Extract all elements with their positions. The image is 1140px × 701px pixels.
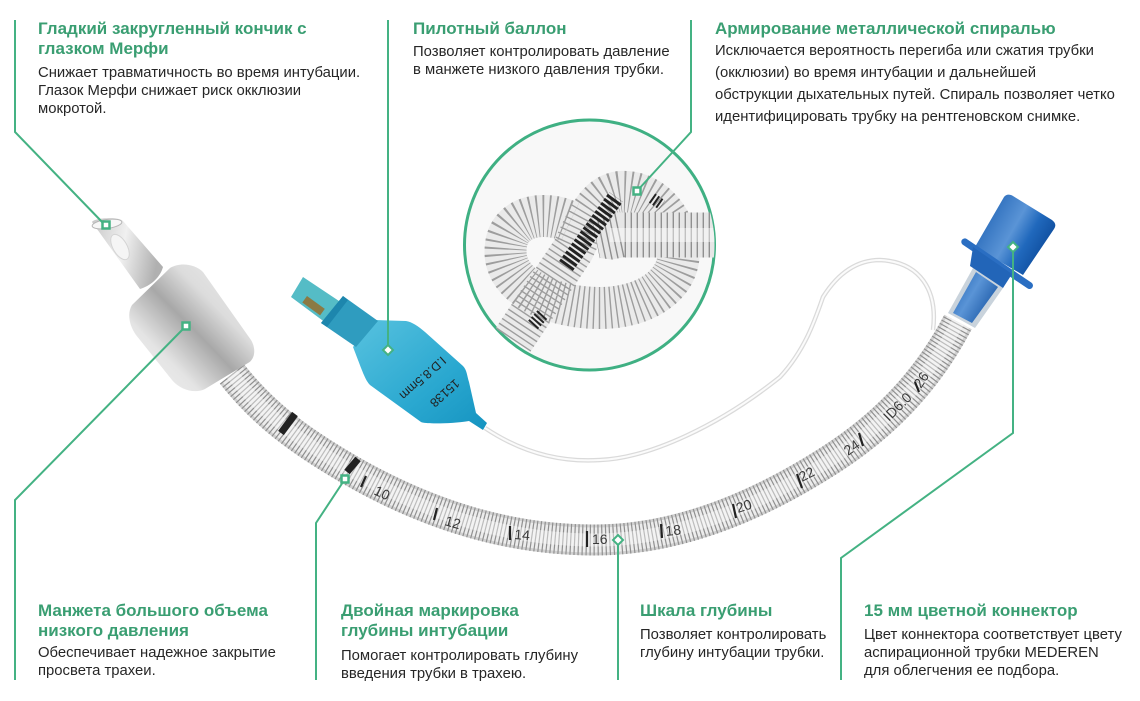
text: depth marking: введения трубки в трахею.: [341, 666, 526, 682]
leader line: spiral: [634, 20, 691, 194]
pilot line tube: [485, 260, 934, 460]
leader line: cuff: [15, 322, 190, 680]
depth scale text: 14: [514, 526, 531, 543]
leader line: connector: [841, 242, 1018, 680]
depth scale text: 24: [841, 436, 863, 458]
depth scale text: 18: [665, 521, 682, 539]
text: connector: для облегчения ее подбора.: [864, 663, 1059, 679]
text: cuff: просвета трахеи.: [38, 663, 156, 679]
cuff: [129, 265, 254, 391]
text: connector: аспирационной трубки MEDEREN: [864, 645, 1099, 661]
text: tip: Глазок Мерфи снижает риск окклюзии: [38, 83, 301, 99]
text: depth marking: [341, 601, 578, 682]
text: pilot balloon: Позволяет контролировать давление: [413, 44, 670, 60]
text: cuff: Манжета большого объема: [38, 601, 268, 620]
text: depth scale: Позволяет контролировать: [640, 627, 826, 643]
depth scale text: 20: [734, 496, 754, 516]
text: depth scale: глубину интубации трубки.: [640, 645, 824, 661]
distal tip with Murphy eye: [92, 217, 163, 289]
pilot balloon: [291, 277, 487, 430]
text: tip: [38, 19, 360, 117]
text: tip: мокротой.: [38, 101, 106, 117]
leader line: pilot balloon: [383, 20, 393, 355]
text: connector: Цвет коннектора соответствует цвету: [864, 627, 1122, 643]
depth scale text: 22: [796, 463, 817, 485]
text: depth marking: глубины интубации: [341, 621, 508, 640]
text: depth marking: Помогает контролировать глубину: [341, 648, 578, 664]
pilot balloon: I.D.8.5mm: [397, 353, 449, 402]
depth scale text: 16: [592, 531, 608, 547]
text: cuff: Обеспечивает надежное закрытие: [38, 645, 276, 661]
leader line: depth scale: [613, 535, 623, 680]
text: pilot balloon: Пилотный баллон: [413, 19, 566, 38]
text: spiral: обструкции дыхательных путей. Спираль позволяет четко: [715, 87, 1115, 103]
text: spiral: [715, 19, 1115, 125]
text: tip: Снижает травматичность во время интубации.: [38, 65, 360, 81]
depth scale text: ID6.0: [880, 389, 915, 424]
leader line: tip: [15, 20, 110, 228]
text: spiral: Армирование металлической спиралью: [715, 19, 1056, 38]
text: spiral: (окклюзии) во время интубации и дальнейшей: [715, 65, 1036, 81]
text: connector: [864, 601, 1122, 679]
text: cuff: низкого давления: [38, 621, 189, 640]
blue connector: [948, 195, 1055, 328]
text: depth marking: Двойная маркировка: [341, 601, 519, 620]
depth scale text: 26: [910, 369, 932, 391]
text: tip: глазком Мерфи: [38, 39, 169, 58]
depth band markers: [281, 414, 358, 472]
text: spiral: Исключается вероятность перегиба или сжатия трубки: [715, 43, 1094, 59]
depth scale text: 12: [443, 513, 463, 532]
depth scale text: 10: [372, 482, 393, 503]
text: spiral: идентифицировать трубку на рентгеновском снимке.: [715, 109, 1080, 125]
text: depth scale: Шкала глубины: [640, 601, 772, 620]
knot inset circle: [464, 120, 716, 370]
pilot balloon: 15138: [427, 376, 462, 410]
text: connector: 15 мм цветной коннектор: [864, 601, 1078, 620]
leader line: depth marking: [316, 476, 348, 680]
text: pilot balloon: [413, 19, 670, 78]
text: tip: Гладкий закругленный кончик с: [38, 19, 307, 38]
depth scale text: [372, 369, 932, 547]
endotracheal tube body with spiral: [232, 322, 958, 547]
text: pilot balloon: в манжете низкого давления трубки.: [413, 62, 664, 78]
text: depth scale: [640, 601, 826, 661]
text: cuff: [38, 601, 276, 679]
